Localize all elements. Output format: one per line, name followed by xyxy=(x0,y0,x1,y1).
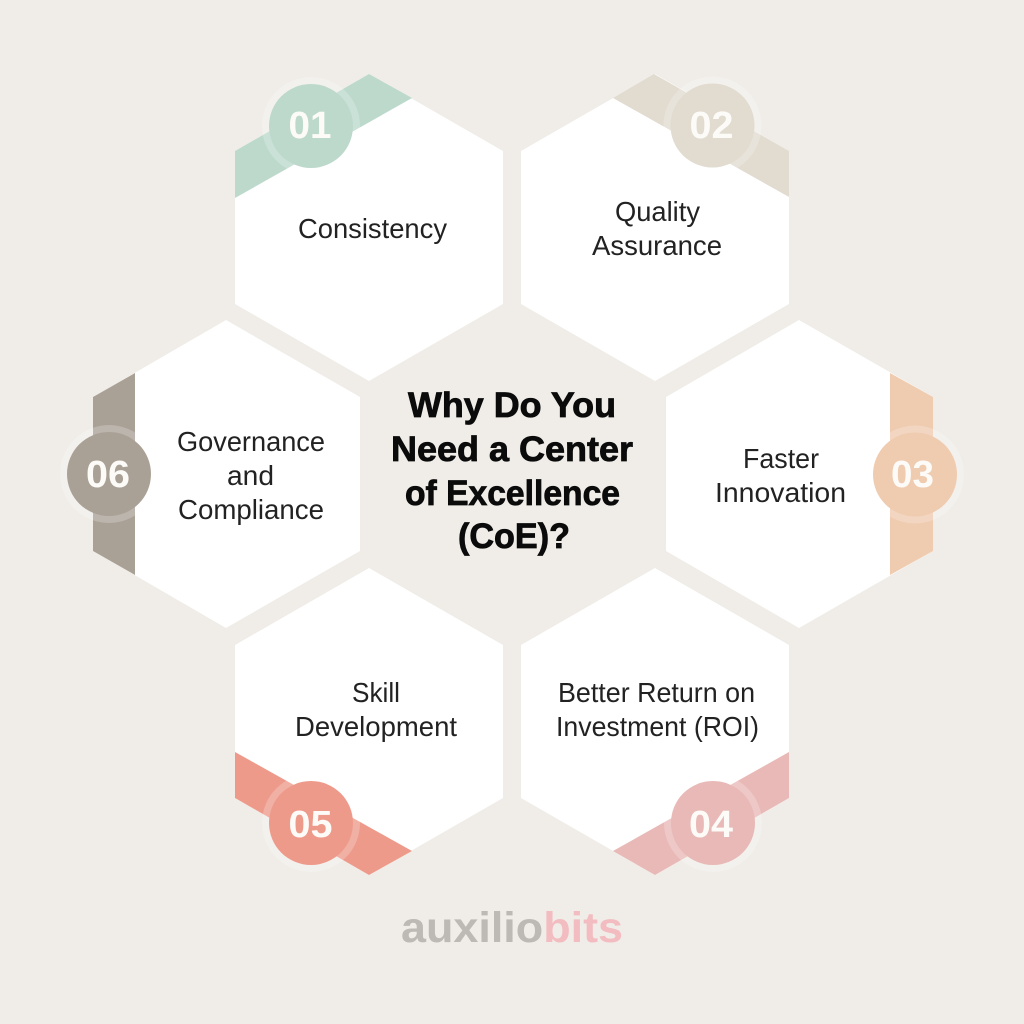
label: Skill Development: Skill xyxy=(352,677,400,708)
label: Skill Development xyxy=(295,677,457,742)
label: Faster Innovation xyxy=(715,443,846,508)
label: Faster Innovation: Faster xyxy=(743,443,819,474)
title: of Excellence xyxy=(405,474,620,513)
label: Governance and Compliance: Governance xyxy=(177,426,325,457)
label: Consistency: Consistency xyxy=(298,213,447,244)
title: (CoE)? xyxy=(458,517,570,556)
badge: 05 xyxy=(262,774,360,872)
label: Skill Development: Development xyxy=(295,711,457,742)
label: Quality Assurance xyxy=(592,196,722,261)
badge: 05: 05 xyxy=(288,804,332,846)
label: Governance and Compliance xyxy=(177,426,325,525)
badge: 03: 03 xyxy=(891,454,934,496)
label: Governance and Compliance: and xyxy=(227,460,274,491)
label: Better Return on Investment (ROI) xyxy=(556,677,759,742)
band: 03 accent xyxy=(890,373,933,575)
title: Need a Center xyxy=(391,430,633,469)
badge: 02: 02 xyxy=(690,105,734,147)
panel: 05 Skill Development xyxy=(235,568,503,875)
panel: 01 Consistency xyxy=(235,74,503,381)
title: Why Do You xyxy=(408,386,616,425)
badge: 04: 04 xyxy=(689,804,733,846)
badge: 06: 06 xyxy=(86,454,130,496)
label: Better Return on Investment (ROI): Investment (ROI) xyxy=(556,711,759,742)
band: 01 accent xyxy=(235,74,412,198)
band: 02 accent xyxy=(613,74,789,197)
badge: 02 xyxy=(664,76,762,174)
panel: 02 Quality Assurance xyxy=(521,74,789,381)
badge: 03 xyxy=(866,426,964,524)
label: Governance and Compliance: Compliance xyxy=(178,494,324,525)
label: Quality Assurance: Quality xyxy=(615,196,700,227)
logo: auxiliobits: auxiliobits xyxy=(401,904,623,952)
badge: 01 xyxy=(262,77,360,175)
panel: 06 Governance and Compliance xyxy=(60,320,360,628)
badge: 06 xyxy=(60,425,158,523)
band: 06 accent xyxy=(93,373,135,575)
label: Faster Innovation: Innovation xyxy=(715,477,846,508)
title xyxy=(391,386,633,556)
label: Quality Assurance: Assurance xyxy=(592,230,722,261)
badge: 04 xyxy=(664,774,762,872)
label: Better Return on Investment (ROI): Better Return on xyxy=(558,677,755,708)
panel: 03 Faster Innovation xyxy=(666,320,964,628)
panel: 04 Better Return on Investment xyxy=(521,568,789,875)
band: 05 accent xyxy=(235,752,412,875)
band: 04 accent xyxy=(613,752,789,875)
badge: 01: 01 xyxy=(288,105,332,147)
